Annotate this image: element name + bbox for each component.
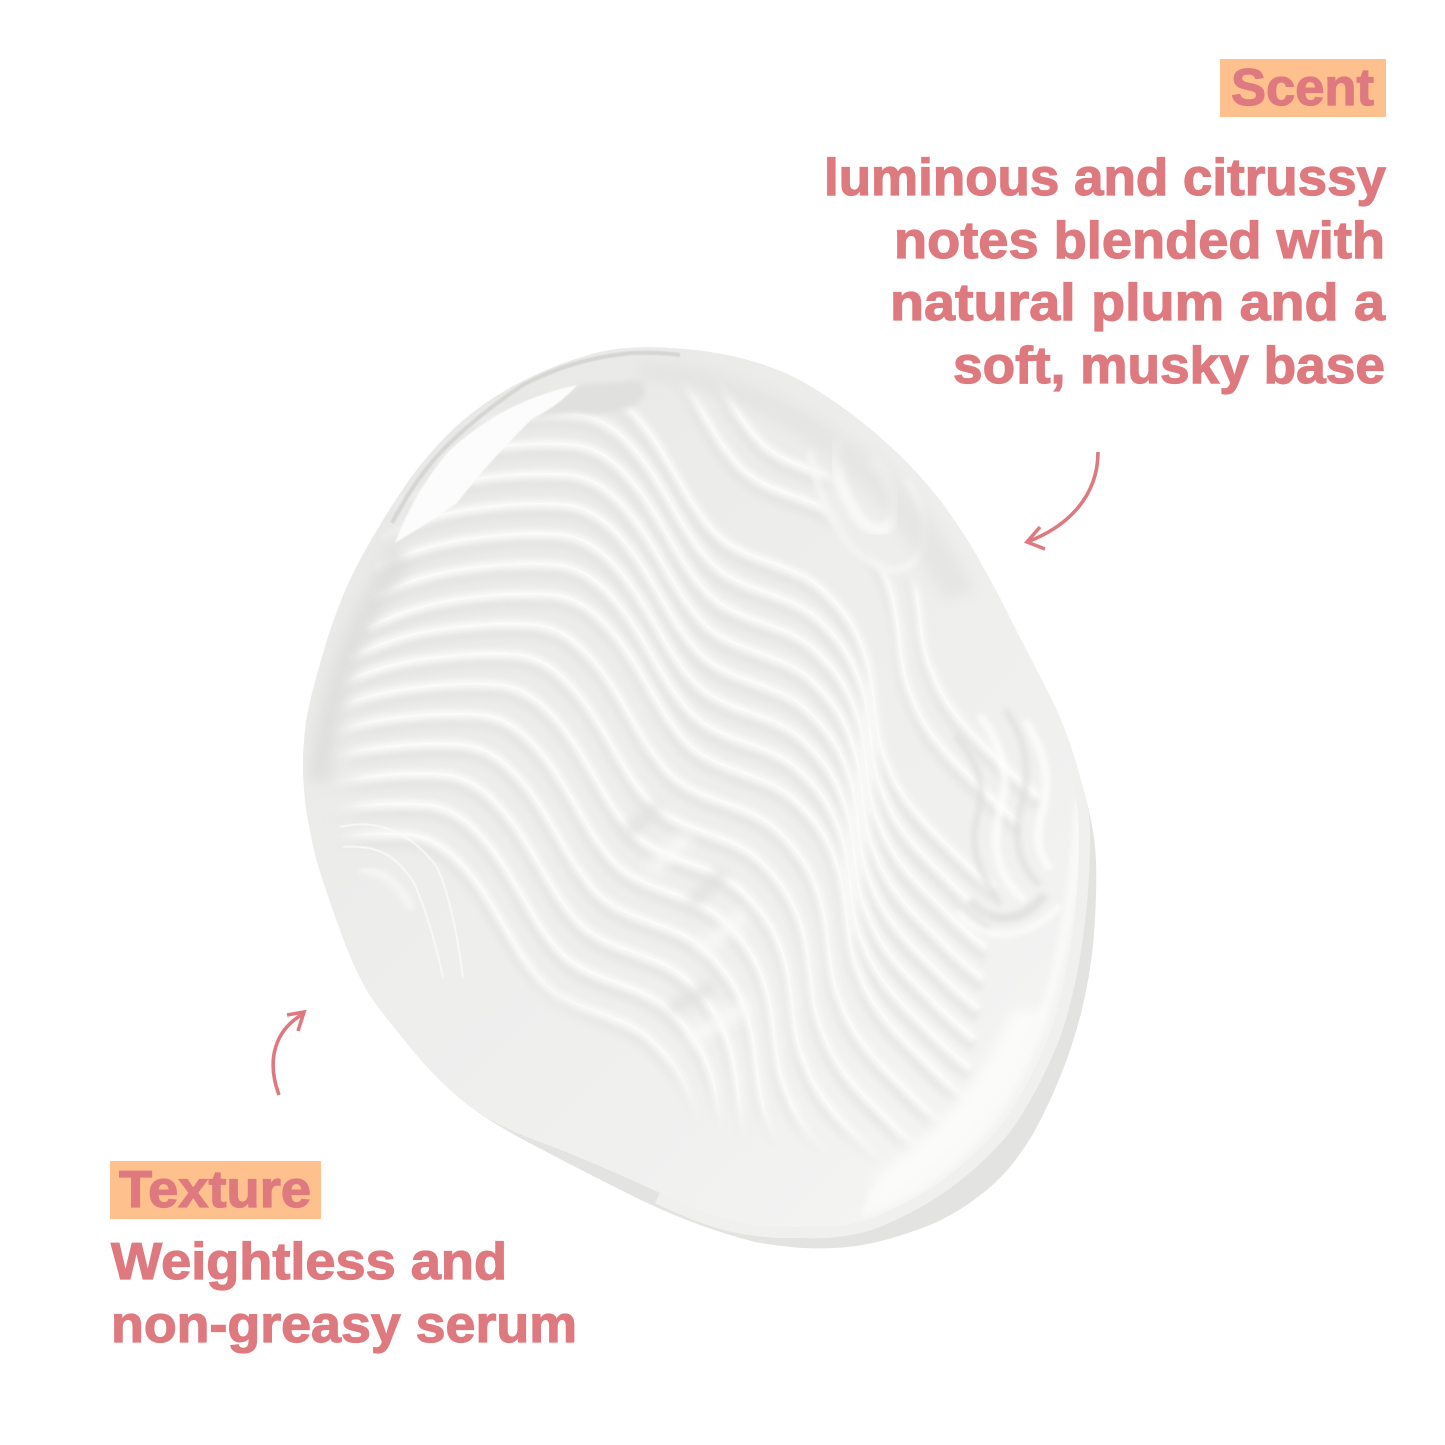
scent label: Scent [1231,59,1374,117]
bottom right glossy highlight [860,800,1085,1218]
top right swirl nest [814,466,916,584]
serum swatch illustration [303,347,1096,1248]
gray rim on top left edge [392,353,680,523]
texture label: Texture [119,1161,311,1219]
left edge shade [313,553,406,776]
right ripple cells [956,712,1050,934]
scent description: notes blended with [894,212,1385,270]
grey area above ridges [540,383,643,416]
centre ripple patch [625,805,750,1040]
texture description [111,1233,577,1354]
texture description: non-greasy serum [111,1296,577,1354]
scent description: luminous and citrussy [824,149,1386,207]
swatch outer rim and shadow [303,347,1096,1248]
swirl ridges [350,395,1040,1132]
arrow: texture to swatch [273,1012,304,1095]
arrow: scent to swatch [1027,452,1098,549]
scent description: natural plum and a [890,274,1386,332]
scent description: soft, musky base [953,337,1385,395]
glass highlight top left [395,385,577,543]
scent description [824,149,1386,395]
swatch top face [304,348,1079,1216]
texture description: Weightless and [111,1233,507,1291]
top right grey shade [720,384,954,586]
left nested arcs [340,824,463,977]
swatch inner bevel [660,696,1079,1227]
